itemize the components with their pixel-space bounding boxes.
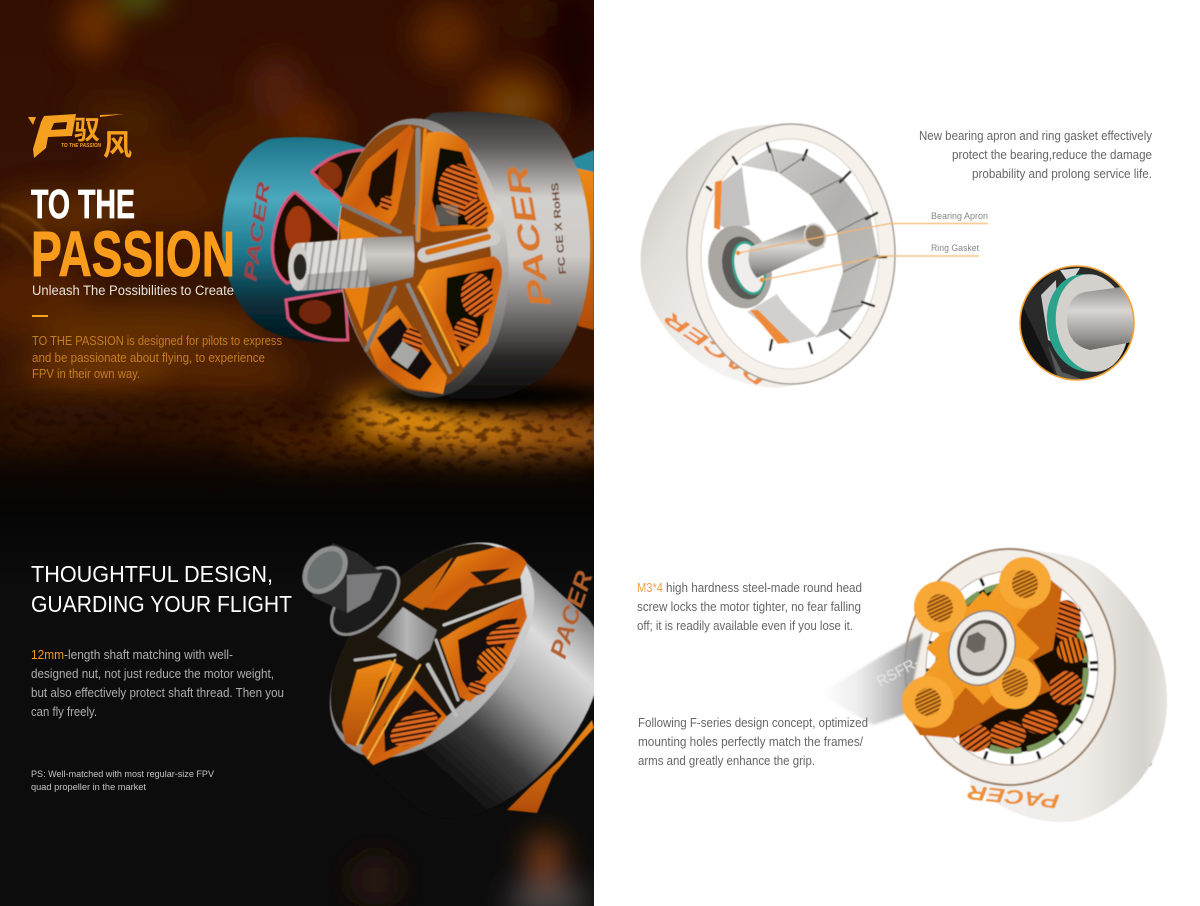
window: top <box>423 547 527 610</box>
title: TO THE: TO THE <box>31 181 135 227</box>
rim <box>905 549 1115 785</box>
teal window lower <box>286 290 348 340</box>
shaft paragraph: -length shaft matching with well- <box>64 648 233 662</box>
leader line: ring gasket <box>762 256 979 280</box>
intro paragraph <box>32 334 282 381</box>
intro paragraph: TO THE PASSION is designed for pilots to express <box>32 334 282 348</box>
window: left <box>342 660 403 747</box>
spider arm upper <box>720 167 750 230</box>
grip paragraph: arms and greatly enhance the grip. <box>638 754 815 768</box>
motor: blurred teal motor behind: PACER <box>240 181 274 283</box>
logo: P 驭风 brand mark: TO THE PASSION <box>61 143 101 149</box>
mount side wall <box>905 570 1062 738</box>
motor body <box>960 550 1167 822</box>
grip paragraph: mounting holes perfectly match the frames/ <box>638 735 863 749</box>
bearing paragraph: New bearing apron and ring gasket effectively <box>919 129 1153 143</box>
PS note: PS: Well-matched with most regular-size FPV <box>31 769 215 780</box>
outer ring <box>687 124 895 384</box>
body logo PACER upside down: PACER <box>966 780 1061 812</box>
shaft <box>377 607 437 660</box>
leader line: bearing apron <box>738 224 988 253</box>
threaded holes <box>915 570 1038 716</box>
nut lit face <box>347 573 382 613</box>
ribbon text: RSFR- <box>874 654 922 691</box>
magnet seams <box>770 148 878 312</box>
panel: dark left column <box>0 0 640 906</box>
subtitle: Unleash The Possibilities to Create <box>32 283 234 298</box>
spokes <box>343 130 493 372</box>
PS note: quad propeller in the market <box>31 782 146 793</box>
PS note <box>31 769 215 793</box>
accent dash <box>32 315 48 317</box>
heading: thoughtful design <box>31 561 292 617</box>
magnets <box>740 148 878 338</box>
shadow under main motor <box>375 383 605 409</box>
hub <box>699 218 781 316</box>
bearing paragraph <box>919 129 1153 181</box>
center bearing and hex screw <box>937 600 1027 696</box>
stator dark and copper coils <box>432 148 484 226</box>
grip paragraph: Following F-series design concept, optimized <box>638 716 868 730</box>
window: right <box>440 597 527 702</box>
screw paragraph <box>637 581 862 633</box>
leader dots <box>736 251 764 282</box>
bearing paragraph: protect the bearing,reduce the damage <box>952 148 1152 162</box>
window: upper left <box>403 557 453 610</box>
motor logo PACER: PACER <box>500 163 558 310</box>
window: lower right <box>417 256 502 368</box>
window: upper left <box>340 125 414 228</box>
intro paragraph: FPV in their own way. <box>32 367 140 381</box>
motor body <box>329 542 594 809</box>
window: upper right <box>413 132 494 232</box>
inset: bearing close-up <box>1015 260 1143 385</box>
motor: rear view with orange mount <box>820 549 1167 822</box>
shaft paragraph: designed nut, not just reduce the motor weight, <box>31 667 274 681</box>
body logo PACER: PACER <box>661 307 771 390</box>
slot dividers <box>930 576 1094 760</box>
heading: thoughtful design: GUARDING YOUR FLIGHT <box>31 591 292 617</box>
slot ring <box>926 571 1098 765</box>
shaft end <box>288 243 308 291</box>
window: left <box>339 218 385 330</box>
magnet dividers <box>707 143 886 353</box>
threaded shaft <box>298 238 370 291</box>
motor: blurred teal motor behind <box>222 137 594 343</box>
hero background with bokeh and ground <box>0 0 630 512</box>
hex nut <box>303 543 382 613</box>
intro paragraph: and be passionate about flying, to experience <box>32 351 265 365</box>
shaft <box>749 225 825 278</box>
body logo PACER: PACER <box>545 567 599 662</box>
shaft paragraph <box>31 648 284 719</box>
ribbon tool <box>820 633 923 725</box>
screw paragraph: screw locks the motor tighter, no fear falling <box>637 600 861 614</box>
window: bottom <box>360 677 447 765</box>
orange mount behind motor <box>507 720 594 813</box>
logo: P 驭风 brand mark: 驭 <box>74 115 100 145</box>
logo: P 驭风 brand mark <box>28 114 132 162</box>
motor: orange motor with nut <box>302 542 594 814</box>
inner opening <box>701 139 879 369</box>
mount X plate <box>902 557 1051 728</box>
window: bottom <box>363 305 447 394</box>
screw paragraph: off; it is readily available even if you lose it. <box>637 619 853 633</box>
logo: P 驭风 brand mark: 风 <box>103 130 132 162</box>
motor: cutaway rotor bell <box>641 124 988 390</box>
label: bearing apron: Bearing Apron <box>931 211 988 222</box>
coils <box>959 600 1087 752</box>
orange accent lower <box>750 310 790 344</box>
stator <box>936 583 1088 753</box>
washer <box>320 556 410 646</box>
green stator teeth <box>938 585 1086 751</box>
screw paragraph: M3*4 <box>637 581 663 595</box>
shaft bore <box>801 221 829 251</box>
label: ring gasket: Ring Gasket <box>931 243 979 254</box>
teal window middle <box>273 192 340 283</box>
spoke highlights <box>355 595 525 758</box>
motor body silver <box>424 111 591 400</box>
orange accent upper <box>714 180 722 230</box>
grip paragraph <box>638 716 868 768</box>
bearing paragraph: probability and prolong service life. <box>972 167 1152 181</box>
bell body <box>641 124 800 388</box>
face recess <box>338 124 492 392</box>
shaft paragraph: 12mm <box>31 648 64 662</box>
thread shading <box>298 270 370 291</box>
stator and coils <box>458 618 518 692</box>
motor: orange and silver main motor <box>288 111 590 405</box>
heading: thoughtful design: THOUGHTFUL DESIGN, <box>31 561 273 587</box>
shaft paragraph: but also effectively protect shaft thread. Then you <box>31 686 284 700</box>
screw paragraph: high hardness steel-made round head <box>666 581 862 595</box>
nut opening <box>297 541 353 599</box>
teal window upper <box>312 150 366 210</box>
shaft paragraph: can fly freely. <box>31 705 97 719</box>
certification marks: FC CE X RoHS <box>550 182 569 275</box>
bottom panel background <box>0 510 594 906</box>
bolt stub <box>1130 745 1152 780</box>
smooth shaft <box>363 236 414 287</box>
face ring <box>336 118 508 398</box>
spider arm lower <box>747 294 817 344</box>
title: PASSION: PASSION <box>31 218 235 290</box>
